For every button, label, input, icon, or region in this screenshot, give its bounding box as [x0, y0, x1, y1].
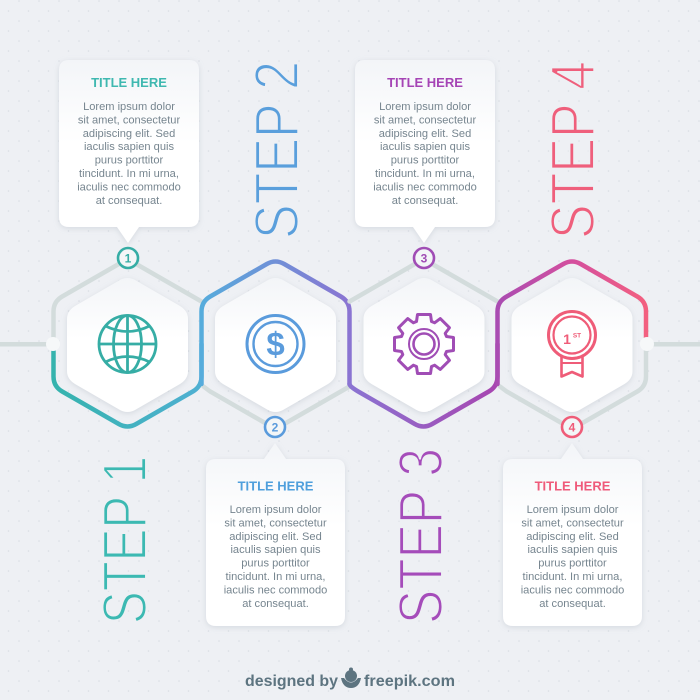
text block: step 4 body: adipiscing elit. Sed: [526, 531, 619, 543]
heading: STEP 3: STEP 3: [387, 448, 456, 624]
heading: STEP 4: STEP 4: [539, 61, 608, 239]
text block: step 4 body: purus porttitor: [538, 558, 607, 570]
number badge 2: 2: [272, 420, 279, 434]
text block: step 3 body: adipiscing elit. Sed: [379, 128, 471, 140]
text block: step 2 body: Lorem ipsum dolor: [230, 504, 322, 516]
heading: step 1 title: TITLE HERE: [91, 75, 167, 90]
text block: step 4 body: at consequat.: [539, 598, 606, 610]
hexagon chain outlines: [54, 262, 646, 426]
text block: step 1 body: tincidunt. In mi urna,: [79, 168, 179, 180]
footer credit: [245, 668, 455, 690]
text block: step 3 body: iaculis nec commodo: [373, 181, 477, 193]
icon: first place medal: ST: [573, 332, 581, 340]
hexagon 1 outline: [54, 262, 202, 426]
number badge 4: [562, 417, 582, 437]
text block: step 2 body: adipiscing elit. Sed: [229, 531, 322, 543]
panel: white hexagon 3: [364, 278, 484, 412]
text block: step 1 body: iaculis nec commodo: [77, 181, 181, 193]
text block: step 1 body: adipiscing elit. Sed: [83, 128, 175, 140]
text block: step 4 body: sit amet, consectetur: [521, 517, 624, 529]
text block: step 1 body: Lorem ipsum dolor: [83, 101, 175, 113]
number badge 4: 4: [569, 420, 576, 434]
panel: step 2 card: [206, 443, 345, 626]
hexagon 2 outline: [202, 262, 350, 426]
text block: step 1 body: at consequat.: [96, 195, 162, 207]
footer credit: freepik.com: [364, 673, 455, 690]
text block: step 2 body: tincidunt. In mi urna,: [226, 571, 325, 583]
text block: step 4 body: tincidunt. In mi urna,: [523, 571, 622, 583]
icon: first place medal: 1: [563, 331, 571, 347]
text block: step 1 body: iaculis sapien quis: [84, 141, 174, 153]
connector node: right: [640, 337, 654, 351]
text block: step 1 body: [77, 101, 181, 207]
panel: white hexagon 1: [67, 278, 188, 412]
text block: step 2 body: purus porttitor: [241, 558, 310, 570]
panel: white hexagon 2: [215, 278, 336, 412]
heading: step 2 title: TITLE HERE: [238, 478, 314, 494]
connector line: right: [652, 342, 700, 346]
number badge 1: [118, 248, 138, 268]
panel: step 3 card: [355, 60, 495, 243]
hexagon 4 outline: [498, 262, 646, 426]
text block: step 2 body: [224, 504, 327, 610]
connector line: left: [0, 342, 48, 346]
heading: STEP 2: STEP 2: [243, 61, 312, 239]
panel: step 4 card: [503, 443, 642, 626]
footer credit: designed by: [245, 673, 338, 690]
number badge 3: 3: [421, 251, 428, 265]
panel: step 1 card: [59, 60, 199, 243]
text block: step 3 body: iaculis sapien quis: [380, 141, 470, 153]
heading: STEP 1: STEP 1: [91, 456, 160, 624]
text block: step 3 body: [373, 101, 477, 207]
icon: first place medal: [548, 312, 596, 376]
icon: dollar coin: $: [266, 326, 285, 362]
text block: step 3 body: Lorem ipsum dolor: [379, 101, 471, 113]
heading: step 4 title: TITLE HERE: [535, 478, 611, 494]
icon: dollar coin: [247, 316, 304, 372]
number badge 1: 1: [125, 251, 132, 265]
icon: gear: [394, 314, 454, 374]
text block: step 4 body: Lorem ipsum dolor: [527, 504, 619, 516]
icon: freepik logo: [341, 668, 361, 688]
text block: step 2 body: iaculis nec commodo: [224, 584, 327, 596]
text block: step 3 body: purus porttitor: [391, 155, 460, 167]
number badge 2: [265, 417, 285, 437]
text block: step 2 body: at consequat.: [242, 598, 309, 610]
text block: step 2 body: iaculis sapien quis: [230, 544, 321, 556]
connector node: left: [46, 337, 60, 351]
panel: white hexagon 4: [512, 278, 632, 412]
text block: step 3 body: tincidunt. In mi urna,: [375, 168, 475, 180]
text block: step 1 body: sit amet, consectetur: [78, 114, 180, 126]
text block: step 1 body: purus porttitor: [95, 155, 164, 167]
text block: step 4 body: iaculis sapien quis: [527, 544, 618, 556]
hexagon 3 outline: [350, 262, 498, 426]
text block: step 3 body: sit amet, consectetur: [374, 114, 476, 126]
text block: step 4 body: iaculis nec commodo: [521, 584, 624, 596]
text block: step 4 body: [521, 504, 624, 610]
number badge 3: [414, 248, 434, 268]
text block: step 3 body: at consequat.: [392, 195, 458, 207]
icon: globe: [99, 316, 156, 372]
text block: step 2 body: sit amet, consectetur: [224, 517, 327, 529]
heading: step 3 title: TITLE HERE: [387, 75, 463, 90]
